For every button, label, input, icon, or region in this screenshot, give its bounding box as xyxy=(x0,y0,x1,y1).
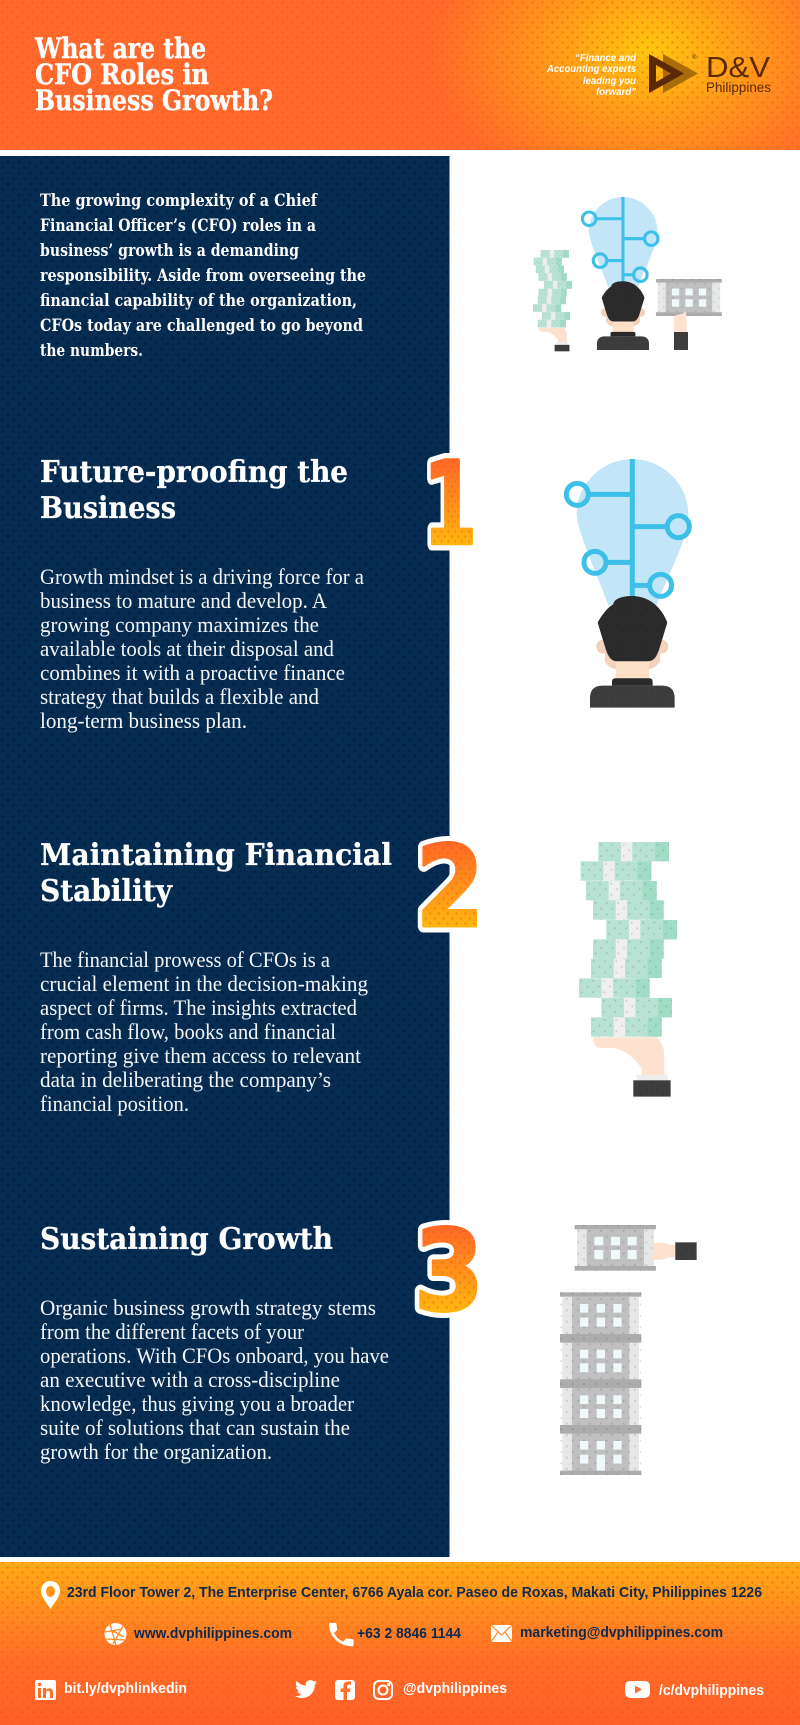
body text: business to mature and develop. A xyxy=(40,588,327,613)
heading xyxy=(40,838,392,909)
icon: twitter xyxy=(295,1680,317,1698)
title: What are the xyxy=(34,32,206,65)
body text: Organic business growth strategy stems xyxy=(40,1295,376,1320)
illustration: hero trio xyxy=(533,197,722,351)
tagline: forward” xyxy=(596,87,636,98)
instagram handle: @dvphilippines xyxy=(403,1680,507,1697)
intro text: Financial Officer’s (CFO) roles in a xyxy=(40,216,316,236)
body text: data in deliberating the company’s xyxy=(40,1067,331,1092)
body text: Growth mindset is a driving force for a xyxy=(40,564,364,589)
body text: an executive with a cross-discipline xyxy=(40,1367,340,1392)
number 1: 1 xyxy=(423,438,477,572)
number 3: 3 xyxy=(414,1207,484,1337)
intro text: the numbers. xyxy=(40,341,143,361)
logo wordmark: Philippines xyxy=(706,80,771,95)
title xyxy=(34,32,273,117)
icon: globe xyxy=(104,1623,126,1645)
heading: Business xyxy=(40,491,176,526)
body text: growing company maximizes the xyxy=(40,612,319,637)
number 2: 2 xyxy=(416,822,484,953)
number 1: 1 xyxy=(423,438,477,572)
icon: facebook xyxy=(335,1680,355,1700)
address: 23rd Floor Tower 2, The Enterprise Center, 6766 Ayala cor. Paseo de Roxas, Makati City, Philippines 1226 xyxy=(67,1584,762,1601)
body text: aspect of firms. The insights extracted xyxy=(40,995,357,1020)
icon: building held by hand xyxy=(575,1225,697,1271)
linkedin url: bit.ly/dvphlinkedin xyxy=(64,1680,187,1697)
icon: head with idea bulb xyxy=(566,459,689,708)
intro text: The growing complexity of a Chief xyxy=(40,191,318,211)
heading xyxy=(40,455,348,526)
icon: linkedin xyxy=(35,1680,56,1700)
tagline: “Finance and xyxy=(575,53,637,64)
body text: growth for the organization. xyxy=(40,1439,272,1464)
icon: money stack on hand xyxy=(579,842,677,1097)
icon: tower building xyxy=(560,1292,641,1475)
title: CFO Roles in xyxy=(35,58,209,91)
body text: crucial element in the decision-making xyxy=(40,971,368,996)
body text: knowledge, thus giving you a broader xyxy=(40,1391,355,1416)
body text: The financial prowess of CFOs is a xyxy=(40,947,330,972)
intro text xyxy=(40,191,366,361)
heading: Stability xyxy=(40,874,173,909)
intro text: CFOs today are challenged to go beyond xyxy=(40,316,363,336)
icon: head with idea bulb small xyxy=(582,197,658,350)
body text: from cash flow, books and financial xyxy=(40,1019,336,1044)
heading: Maintaining Financial xyxy=(40,838,392,873)
body text: suite of solutions that can sustain the xyxy=(40,1415,350,1440)
youtube url: /c/dvphilippines xyxy=(659,1682,764,1699)
body text xyxy=(40,947,368,1116)
title: Business Growth? xyxy=(35,84,273,117)
body text: available tools at their disposal and xyxy=(40,636,334,661)
intro text: responsibility. Aside from overseeing the xyxy=(40,266,366,286)
section 2 xyxy=(40,822,677,1116)
icon: mail xyxy=(491,1625,512,1642)
intro text: financial capability of the organization, xyxy=(40,291,357,311)
body text xyxy=(40,1295,389,1464)
logo wordmark xyxy=(692,52,771,95)
section 1 xyxy=(40,438,689,733)
body text: long-term business plan. xyxy=(40,708,247,733)
header band xyxy=(0,0,800,150)
footer band xyxy=(0,1562,800,1725)
icon: phone xyxy=(329,1623,354,1646)
icon: instagram xyxy=(374,1681,392,1699)
icon: youtube xyxy=(625,1681,650,1698)
number 2: 2 xyxy=(416,822,484,953)
icon: building held up small xyxy=(656,279,722,350)
tagline: Accounting experts xyxy=(546,64,636,75)
contact row xyxy=(104,1623,723,1646)
intro text: business’ growth is a demanding xyxy=(40,241,299,261)
section 3 xyxy=(40,1207,697,1475)
logo mark xyxy=(649,54,698,93)
body text: reporting give them access to relevant xyxy=(40,1043,361,1068)
social row xyxy=(35,1680,764,1700)
body text: operations. With CFOs onboard, you have xyxy=(40,1343,389,1368)
number 1: 1 xyxy=(423,438,477,572)
heading: Future-proofing the xyxy=(40,455,348,490)
logo and tagline xyxy=(546,52,771,98)
website: www.dvphilippines.com xyxy=(133,1625,292,1642)
icon: money stack small xyxy=(533,250,572,351)
icon: location pin xyxy=(41,1581,60,1609)
phone number: +63 2 8846 1144 xyxy=(357,1625,462,1642)
body text: combines it with a proactive finance xyxy=(40,660,345,685)
number 3: 3 xyxy=(414,1207,484,1337)
tagline xyxy=(546,53,637,98)
heading: Sustaining Growth xyxy=(40,1222,333,1257)
address line xyxy=(41,1581,762,1609)
navy panel xyxy=(0,156,450,1557)
body text: from the different facets of your xyxy=(40,1319,305,1344)
number 3: 3 xyxy=(414,1207,484,1337)
body text xyxy=(40,564,364,733)
logo wordmark: ® xyxy=(692,54,697,61)
body text: strategy that builds a flexible and xyxy=(40,684,319,709)
email: marketing@dvphilippines.com xyxy=(520,1624,723,1641)
number 2: 2 xyxy=(416,822,484,953)
logo wordmark: D&V xyxy=(706,52,771,84)
tagline: leading you xyxy=(583,76,636,87)
body text: financial position. xyxy=(40,1091,189,1116)
